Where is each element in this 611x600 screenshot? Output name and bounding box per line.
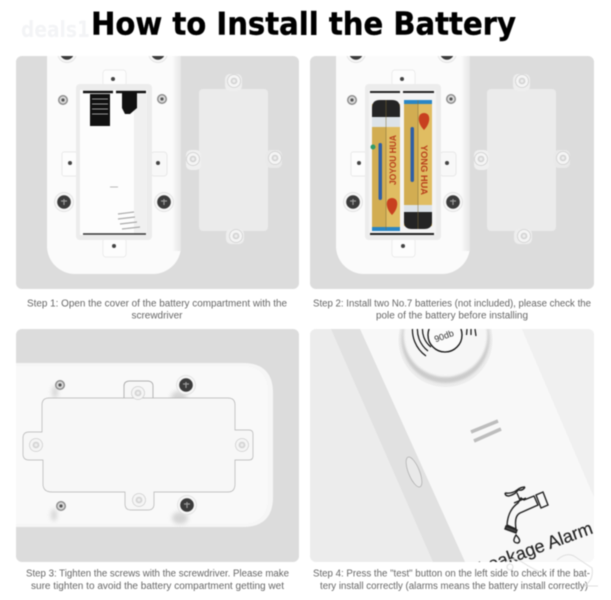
panel: step 3 tighten screws [10, 329, 299, 562]
speaker slots [471, 421, 501, 441]
device body [10, 363, 273, 527]
speaker circle [399, 328, 492, 386]
caption: step 3: sure tighten to avoid the battery compartment getting wet [31, 581, 284, 592]
product label: Leakage Alarm [476, 518, 595, 578]
cover screws [30, 386, 248, 506]
caption: step 2: Step 2: Install two No.7 batteries (not included), please check the [313, 298, 591, 310]
device back with empty compartment [46, 55, 180, 274]
caption: step 4: tery install correctly (alarms means the battery install correctly) [320, 581, 588, 592]
battery right: YONG HUA [419, 145, 429, 196]
caption: step 3 [26, 568, 289, 592]
device back [336, 30, 470, 274]
watermark: deals: deals1 [21, 18, 90, 43]
fitted cover with four tabs [23, 381, 253, 510]
battery left: JOYOU HUA [388, 135, 398, 185]
test button [405, 456, 423, 488]
panel: step 4 test button [310, 328, 594, 563]
caption: step 1: screwdriver [132, 310, 183, 322]
caption: step 4 [313, 568, 590, 592]
icon: water tap [505, 487, 548, 543]
title: How to Install the Battery [91, 6, 516, 42]
screw shadows [51, 386, 188, 524]
caption: step 1: Step 1: Open the cover of the battery compartment with the [27, 298, 287, 310]
device face [360, 329, 594, 562]
corner screws [55, 376, 196, 514]
watermark: corner logo outline [506, 555, 598, 586]
battery right [404, 100, 432, 229]
panel: step 2 install batteries [310, 30, 594, 289]
caption: step 2: pole of the battery before installing [376, 310, 528, 322]
removed cover [186, 74, 282, 244]
caption: step 1 [27, 298, 287, 322]
caption: step 2 [313, 298, 591, 322]
speaker circle: 90db [433, 328, 455, 344]
battery left [370, 100, 400, 231]
caption: step 4: Step 4: Press the "test" button on the left side to check if the bat- [313, 568, 590, 580]
panel: step 1 open compartment [16, 30, 299, 289]
device side strip [331, 329, 465, 562]
removed cover [474, 74, 570, 244]
caption: step 3: Step 3: Tighten the screws with the screwdriver. Please make [26, 568, 289, 580]
